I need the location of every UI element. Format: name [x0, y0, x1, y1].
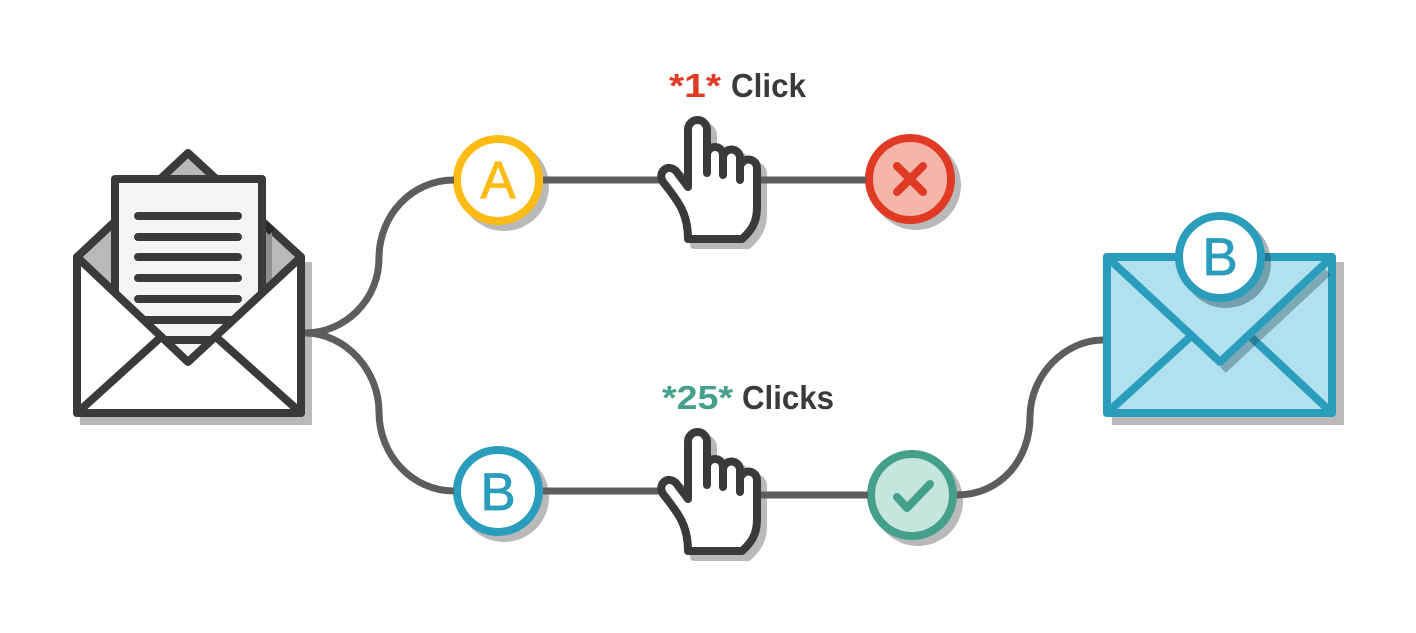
- label: 25 clicks: [662, 379, 834, 416]
- badge: variant B: B: [480, 463, 516, 522]
- icon: green check result: [871, 454, 963, 546]
- letter text lines: [138, 216, 238, 299]
- label: 25 clicks: *25*: [662, 379, 733, 416]
- label: 1 click: [669, 67, 807, 104]
- icon: winning blue envelope: B: [1202, 228, 1238, 287]
- icon: pointer hand bottom shadow: [667, 438, 763, 557]
- icon: winning blue envelope: [1107, 216, 1344, 425]
- icon: pointer hand bottom: [661, 432, 757, 551]
- connector lines: [305, 180, 1103, 495]
- label: 1 click: Click: [731, 67, 807, 104]
- badge: variant A: [457, 139, 549, 231]
- badge: variant A: A: [480, 151, 516, 210]
- label: 1 click: *1*: [669, 67, 721, 104]
- icon: pointer hand top shadow: [667, 126, 763, 245]
- badge: variant B: [457, 450, 549, 542]
- label: 25 clicks: Clicks: [742, 379, 834, 416]
- icon: pointer hand top: [661, 120, 757, 239]
- icon: red cross result: [869, 138, 961, 230]
- icon: open envelope with letter: [77, 153, 312, 425]
